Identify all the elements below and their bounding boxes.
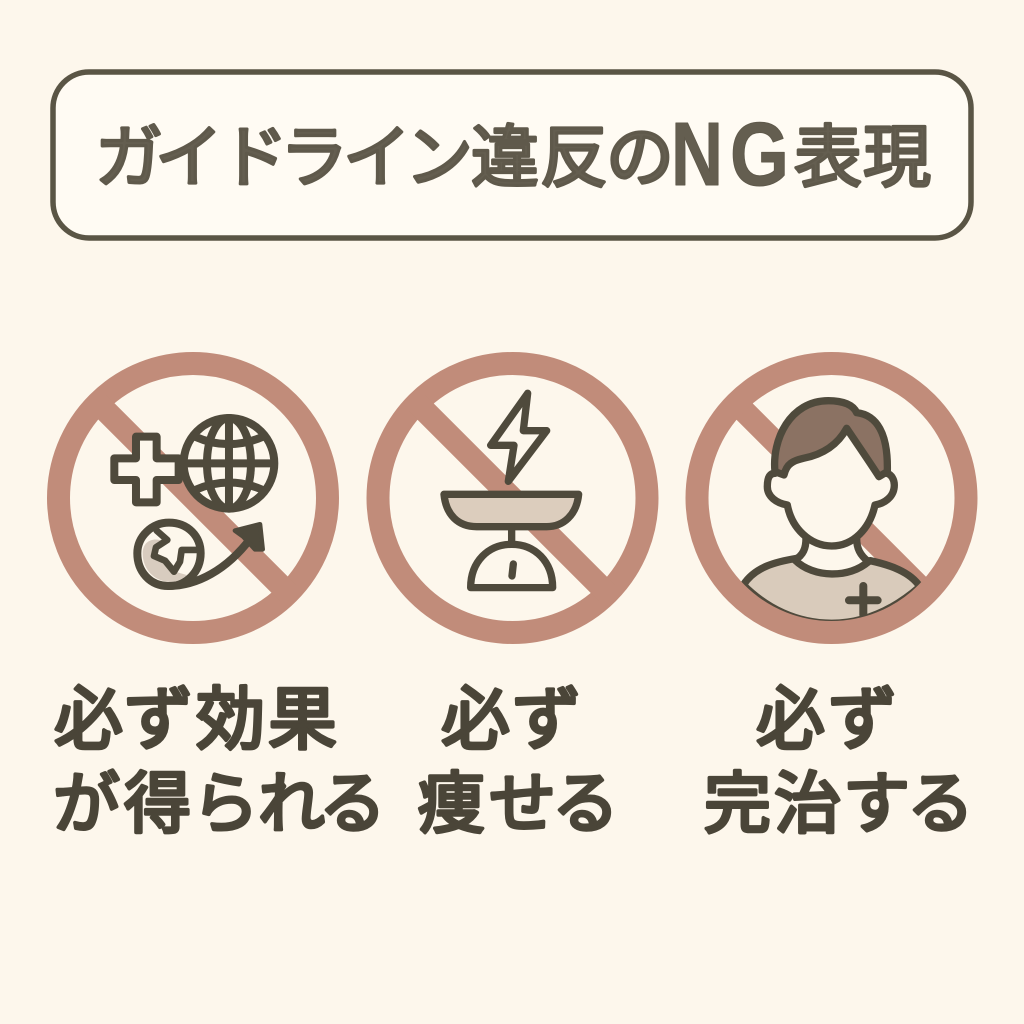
prohibition sign 2 — [378, 364, 647, 632]
panel: guaranteed effect — [58, 364, 328, 632]
caption 2: 必ず — [441, 681, 581, 758]
icon: lightning bolt — [491, 393, 547, 481]
icon: plus mark — [849, 586, 878, 615]
prohibition ring 3 — [697, 364, 966, 632]
panel: guaranteed cure — [697, 364, 966, 632]
icon: upward arrow — [168, 524, 263, 586]
icon: scale pan — [444, 494, 579, 527]
caption 1: 必ず効果 — [54, 681, 337, 758]
icon: earth with continents — [137, 523, 201, 586]
icon: hair — [775, 401, 887, 477]
caption 1: が得られる — [53, 767, 386, 842]
icon: shirt — [743, 558, 920, 623]
caption 3: 必ず — [756, 681, 897, 758]
title text: G — [730, 105, 789, 205]
title text: 表現 — [794, 120, 931, 196]
caption 3 — [704, 681, 974, 842]
title text: N — [671, 105, 723, 205]
title text — [95, 105, 931, 205]
caption 3: 完治する — [704, 767, 974, 842]
prohibition sign 1 — [58, 364, 328, 632]
icon: neck — [795, 538, 868, 574]
icon: scale stem — [501, 528, 523, 543]
panel: guaranteed weight loss — [378, 364, 647, 632]
icon: scale base — [471, 544, 553, 588]
icon: wire globe — [184, 418, 274, 509]
title text: ガイドライン違反の — [95, 120, 674, 196]
icon: lightning and scale — [444, 393, 579, 588]
icon: scale needle — [512, 564, 513, 576]
icon: face and ears — [767, 428, 894, 546]
icon: medical cross — [114, 437, 179, 502]
icon: plus and globes with arrow — [114, 418, 274, 586]
prohibition sign 3 — [736, 403, 926, 593]
caption 2 — [418, 681, 619, 842]
title box — [53, 72, 971, 238]
icon: person — [743, 401, 920, 623]
caption 1 — [53, 681, 386, 842]
caption 2: 痩せる — [418, 767, 619, 842]
